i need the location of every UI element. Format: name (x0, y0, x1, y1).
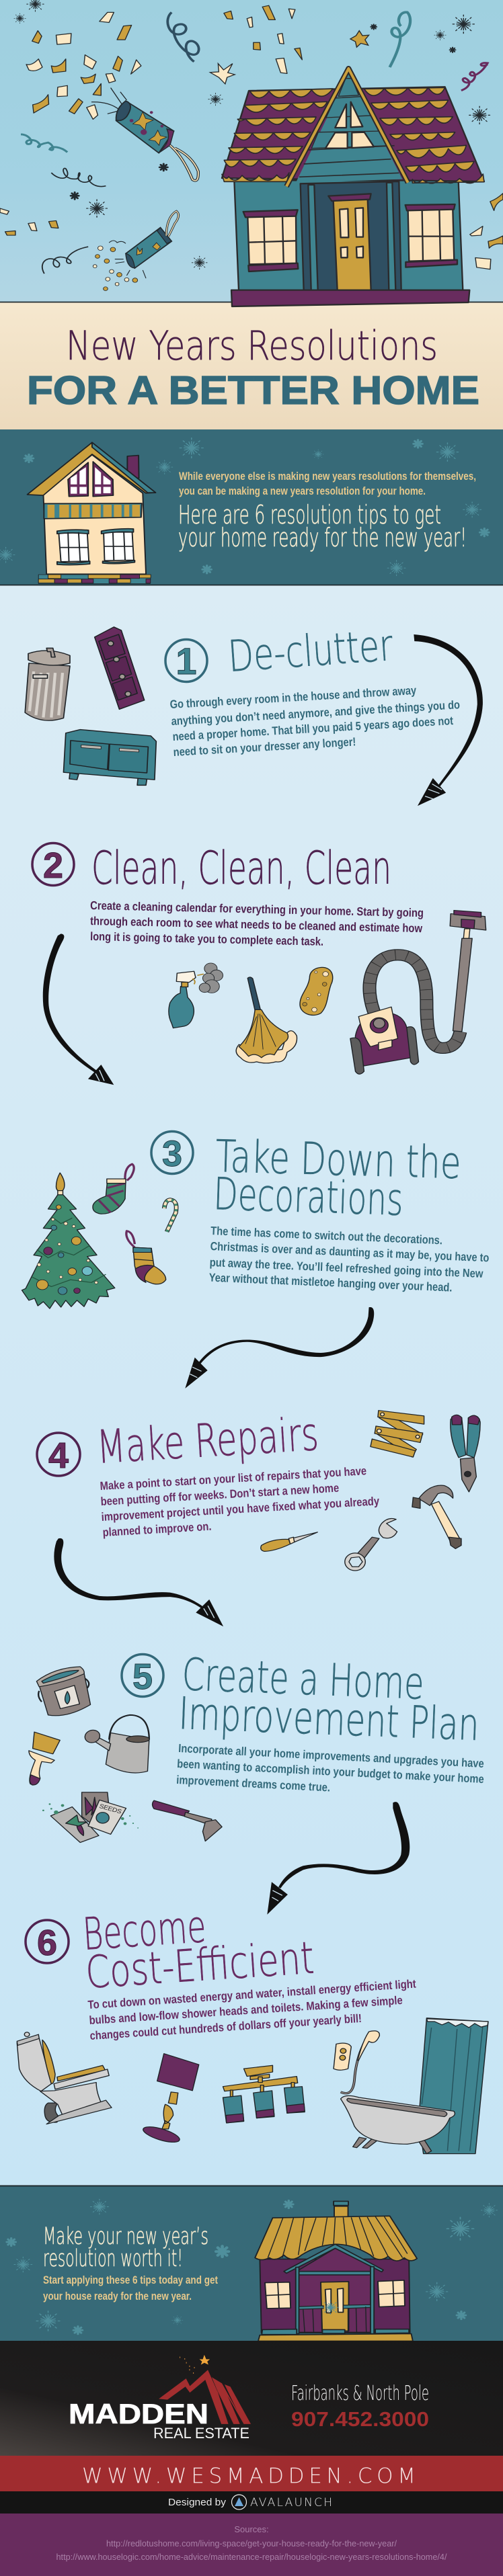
icon: ceiling light (223, 2065, 305, 2123)
designer credit bar: Designed by (168, 2497, 227, 2508)
step 1 number badge: 1 (176, 640, 197, 682)
icon: watering can (82, 1715, 149, 1773)
step 5 number badge (122, 1655, 163, 1697)
streamer: dark lower curl (42, 247, 88, 274)
step 5 heading (178, 1649, 480, 1751)
sparkles (14, 0, 490, 269)
attic windows (68, 462, 113, 497)
right window (405, 204, 457, 267)
step 2 copy (90, 899, 424, 948)
intro band sparkles (0, 438, 489, 576)
step 2 number badge (32, 843, 74, 886)
step 1 (25, 621, 483, 805)
website bar (0, 2456, 503, 2491)
icon: trash can (25, 648, 70, 720)
left window (243, 210, 298, 272)
icon: paint brush (29, 1732, 60, 1785)
sources panel: http://redlotushome.com/living-space/get-your-house-ready-for-the-new-year/ (106, 2538, 397, 2548)
closing copy: Start applying these 6 tips today and get (43, 2274, 218, 2286)
arrow: step 5 to step 6 (268, 1802, 410, 1913)
closing sparkles (7, 2199, 497, 2334)
contact details (291, 2382, 429, 2431)
logo: wordmark: MADDEN (69, 2398, 208, 2429)
streamer: teal top right (390, 12, 410, 67)
thatched roof (255, 2216, 417, 2261)
roof (28, 442, 155, 495)
sources panel: Sources: (234, 2524, 269, 2534)
house body (234, 180, 463, 290)
step 6 (17, 1901, 488, 2154)
lower windows (57, 529, 134, 565)
door (328, 194, 371, 290)
porch base (231, 290, 469, 306)
step 4 number badge: 4 (48, 1436, 69, 1476)
icon: feather duster (236, 977, 297, 1063)
icon: toilet (17, 2032, 112, 2124)
step 3 copy: Year without that mistletoe hanging over your head. (208, 1271, 453, 1294)
icon: seed packets (42, 1792, 139, 1843)
step 6 number badge: 6 (37, 1923, 57, 1963)
closing copy (43, 2223, 218, 2302)
icon: teal cabinet (63, 730, 156, 785)
door (321, 2282, 348, 2331)
icon: garden trowel (153, 1800, 222, 1841)
step 6 icons (17, 2018, 488, 2154)
step 1 heading: De-clutter (227, 621, 395, 682)
foundation bricks (38, 575, 151, 583)
step 1 copy: need a proper home. That bill you paid 5 years ago does not (172, 714, 454, 743)
step 5 icons (29, 1667, 222, 1843)
streamer: purple right (461, 63, 488, 91)
step 5 copy (176, 1741, 484, 1794)
roof (222, 87, 484, 183)
star: cream (210, 64, 235, 84)
sources panel: http://www.houselogic.com/home-advice/maintenance-repair/houselogic-new-years-resolutions-home/4/ (56, 2552, 447, 2562)
step 5 copy: improvement dreams come true. (176, 1773, 331, 1794)
illustration: main house (222, 69, 484, 306)
step 4 copy: been putting off for weeks. Don’t start a new home (100, 1481, 340, 1508)
walls (260, 2259, 410, 2333)
step 3 number badge (151, 1132, 193, 1174)
arrow: step 1 to step 2 (414, 634, 483, 805)
icon: screwdriver (261, 1532, 317, 1551)
closing panel top edge (0, 2186, 503, 2187)
step 2 icons (169, 911, 486, 1074)
icon: folding ruler (371, 1411, 424, 1457)
windows (265, 2280, 405, 2309)
step 3 heading (212, 1130, 462, 1226)
icon: table lamp (141, 2054, 199, 2145)
step 6 heading: Cost-Efficient (84, 1932, 315, 1999)
icon: paint can (36, 1667, 91, 1716)
arrow: step 2 to step 3 (43, 933, 113, 1084)
step 3 number badge: 3 (162, 1134, 182, 1174)
designer credit bar: AVALAUNCH (250, 2496, 332, 2509)
logo: wordmark: REAL ESTATE (153, 2425, 249, 2442)
website bar: WWW.WESMADDEN.COM (82, 2464, 416, 2488)
star: gold (350, 31, 369, 47)
step 6 copy: To cut down on wasted energy and water, install energy efficient light (87, 1977, 416, 2011)
step 2 copy: long it is going to take you to complete each task. (90, 929, 323, 948)
illustration: closing house (255, 2201, 417, 2341)
closing teal panel (0, 2186, 503, 2341)
closing copy: Make your new year’s (43, 2223, 208, 2250)
gable (286, 69, 408, 186)
chimney (334, 2206, 348, 2218)
arrow: step 4 to step 5 (54, 1538, 223, 1626)
door sparkle (322, 2300, 338, 2315)
step 3 copy: The time has come to switch out the decorations. (210, 1224, 442, 1247)
step 4 icons (261, 1411, 480, 1571)
intro copy (178, 470, 476, 552)
step 4 (37, 1408, 480, 1571)
step 6 copy (87, 1977, 416, 2042)
sources panel (0, 2513, 503, 2576)
step 1 icons (25, 627, 156, 785)
background: intro teal band (0, 429, 503, 585)
step 1 number badge (165, 640, 207, 682)
illustration: confetti, stars and streamers (0, 0, 503, 290)
intro copy: you can be making a new years resolution for your home. (179, 485, 426, 497)
step 3 heading: Decorations (212, 1168, 404, 1226)
step 1 copy: Go through every room in the house and throw away (169, 683, 417, 711)
icon: vacuum cleaner (350, 911, 486, 1074)
step 6 copy: changes could cut hundreds of dollars off your yearly bill! (89, 2011, 362, 2042)
step 4 heading: Make Repairs (95, 1408, 320, 1474)
popper: lower (93, 211, 178, 290)
icon: candy cane (164, 1200, 176, 1232)
step 5 number badge: 5 (132, 1657, 153, 1697)
step 6 heading (81, 1901, 315, 1999)
step 1 copy (169, 683, 461, 759)
icon: hammer (412, 1485, 461, 1548)
step 3 icons (22, 1164, 176, 1308)
step 6 copy: bulbs and low-flow shower heads and toilets. Making a few simple (89, 1993, 403, 2027)
step 3 copy (208, 1224, 490, 1294)
step 4 copy: planned to improve on. (102, 1520, 212, 1539)
icon: pliers (451, 1415, 480, 1492)
railings (299, 2304, 371, 2333)
step 4 copy (100, 1464, 380, 1539)
popper: upper (91, 88, 198, 181)
porch gable (297, 2248, 374, 2332)
streamer: dark curl (51, 168, 106, 187)
icon: spray bottle (169, 963, 223, 1028)
icon: patterned stocking (126, 1231, 166, 1284)
stripe band (44, 503, 142, 519)
step 2 number badge: 2 (43, 845, 63, 886)
step 6 number badge (26, 1920, 69, 1963)
closing copy: resolution worth it! (43, 2245, 183, 2272)
porch roof (284, 2244, 383, 2273)
icon: sponge (300, 967, 333, 1015)
background: sky (0, 0, 503, 302)
streamer: teal left (21, 134, 67, 152)
step 4 number badge (37, 1433, 80, 1476)
contact details: 907.452.3000 (291, 2407, 429, 2431)
ground line (0, 302, 503, 585)
base (262, 2329, 409, 2335)
designer credit bar (0, 2491, 503, 2513)
icon: wrench (345, 1519, 397, 1571)
icon: seed packets: SEEDS (98, 1803, 123, 1816)
step 2 copy: Create a cleaning calendar for everything in your home. Start by going (90, 899, 424, 919)
step 2 (32, 842, 486, 1084)
streamer: dark (167, 12, 199, 62)
icon: shower curtain (418, 2018, 488, 2154)
icon: shower head (334, 2031, 379, 2093)
illustration: intro house (28, 442, 155, 583)
step 3 (22, 1130, 490, 1308)
arrow: step 3 to step 4 (186, 1307, 374, 1387)
step 1 copy: need to sit on your dresser any longer! (173, 735, 356, 759)
title line two: FOR A BETTER HOME (27, 368, 479, 413)
logo: wordmark (69, 2398, 249, 2442)
porch (301, 181, 401, 290)
logo: mountain and star (159, 2356, 251, 2424)
confetti (0, 5, 503, 269)
icon: purple dresser (95, 627, 145, 709)
house wall (43, 455, 146, 574)
icon: christmas tree (22, 1173, 115, 1308)
icon: striped stocking (93, 1164, 134, 1214)
background: title sand panel (0, 302, 503, 429)
closing copy: your house ready for the new year. (43, 2290, 192, 2302)
step 4 copy: Make a point to start on your list of repairs that you have (100, 1464, 367, 1493)
chimney (127, 456, 139, 478)
footer: contact panel (0, 2341, 503, 2456)
background: light blue tips panel (0, 585, 503, 2186)
step 5 (29, 1649, 484, 1843)
step 2 copy: through each room to see what needs to be cleaned and estimate how (90, 914, 423, 935)
step 4 copy: improvement project until you have fixed what you already (101, 1494, 380, 1524)
step 6 heading: Become (81, 1901, 208, 1960)
icon: bathtub (341, 2095, 455, 2154)
